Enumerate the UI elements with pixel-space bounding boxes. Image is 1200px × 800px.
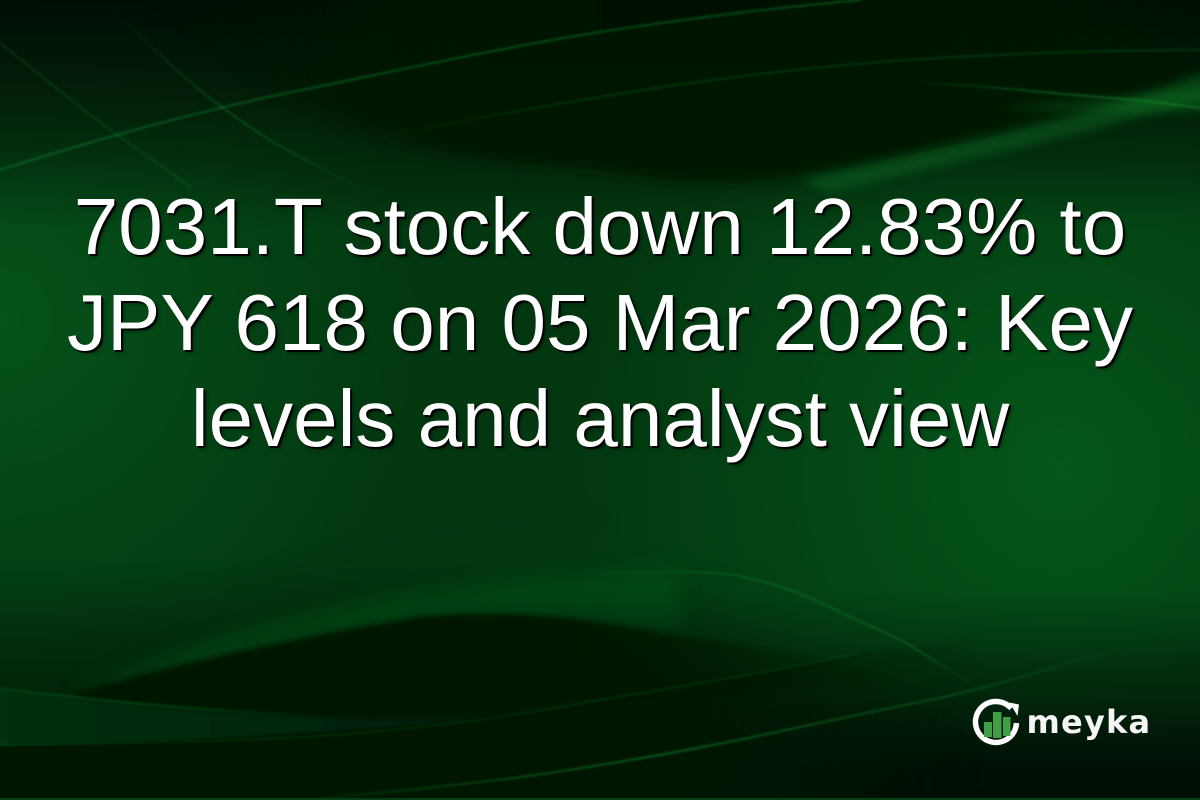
dark lower area below line (0, 656, 859, 798)
title: JPY 618 on 05 Mar 2026: Key (67, 278, 1133, 367)
lower light streaks (0, 572, 1155, 798)
logo wordmark: meyka (1026, 703, 1151, 741)
lower band under wave (0, 689, 511, 744)
title: levels and analyst view (191, 374, 1009, 463)
logo: meyka (972, 698, 1151, 746)
dark top band (366, 96, 1047, 188)
right lower shading (622, 612, 1200, 798)
dark hump (73, 612, 786, 720)
top right bright band (800, 70, 1200, 192)
title (67, 182, 1136, 466)
bright band over hump (70, 568, 680, 693)
title: 7031.T stock down 12.83% to (74, 182, 1126, 271)
lower band shading (0, 598, 350, 698)
bottom edge line (0, 798, 1200, 800)
icon: circular arrow with green bars (972, 698, 1020, 746)
top light streaks (0, 0, 1200, 197)
